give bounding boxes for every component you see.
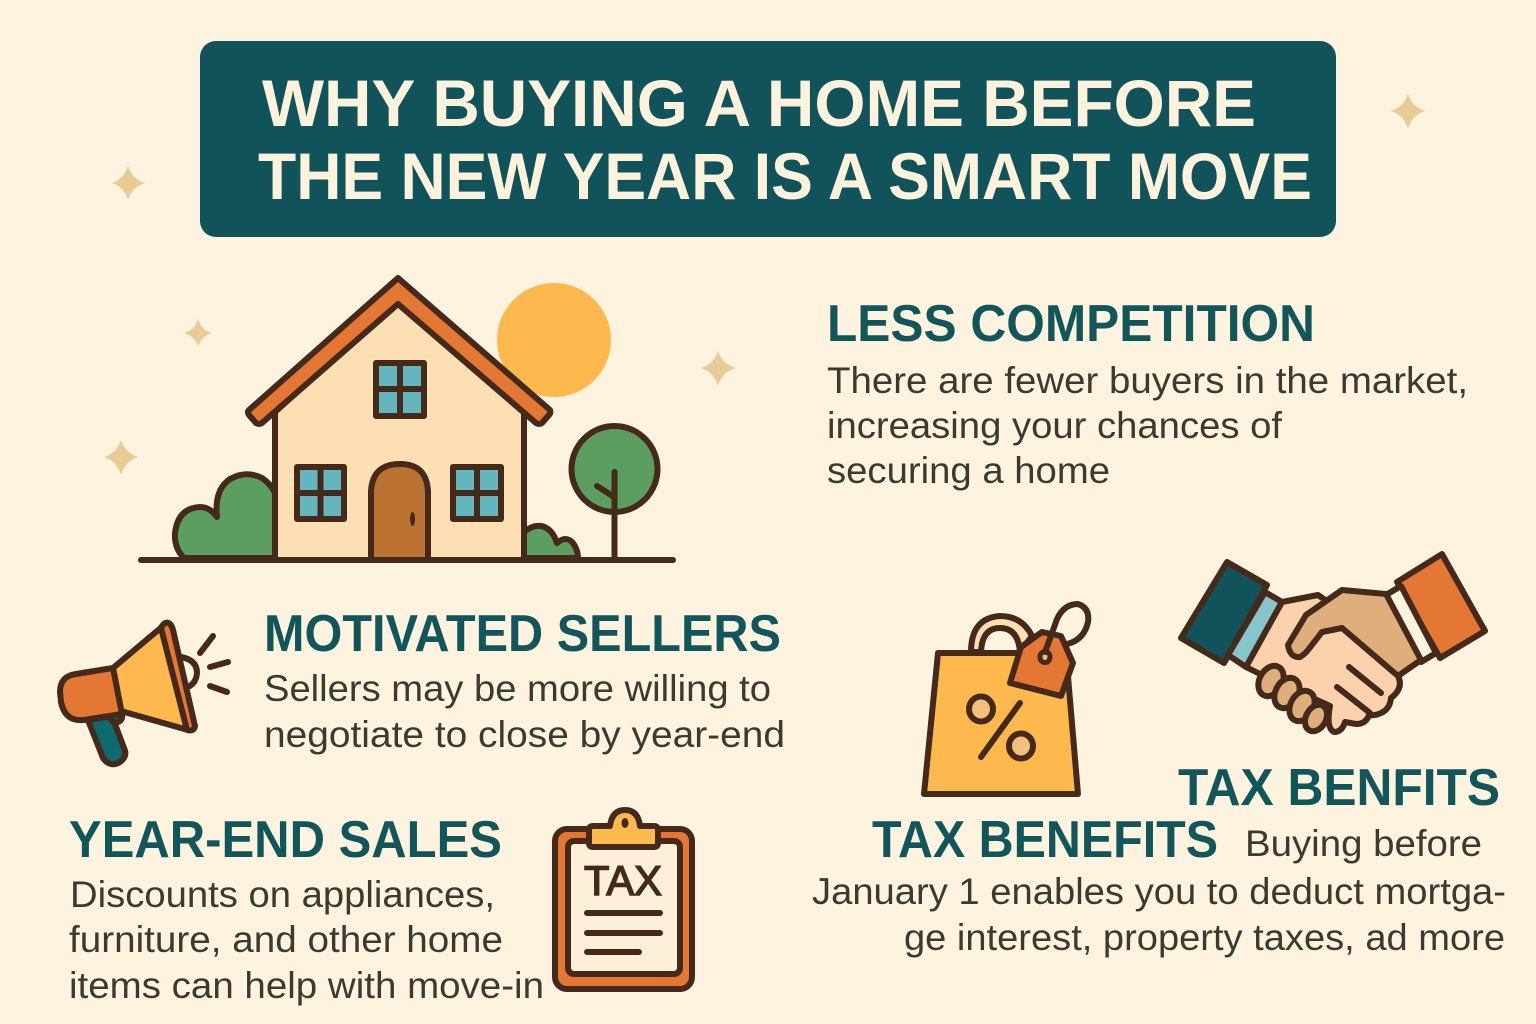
- icon: sparkle lower left of house: [104, 440, 138, 475]
- finger lines: [1337, 667, 1381, 713]
- right bush: [524, 526, 578, 558]
- panel: tax benfits heading: TAX BENFITS: [1178, 759, 1500, 817]
- panel: motivated sellers: Sellers may be more willing to: [264, 668, 771, 709]
- tag string: [1045, 604, 1088, 652]
- bracket: [108, 713, 122, 723]
- panel: year-end sales: Discounts on appliances,: [70, 874, 495, 915]
- panel: tax benefits: ge interest, property taxes, ad more: [904, 917, 1505, 958]
- title banner: THE NEW YEAR IS A SMART MOVE: [258, 139, 1312, 213]
- roof: [248, 278, 550, 424]
- title banner: WHY BUYING A HOME BEFORE: [262, 66, 1256, 140]
- icon: tax clipboard: [555, 810, 692, 989]
- clip hole: [622, 818, 628, 828]
- dark hand: [1288, 590, 1421, 676]
- lower left window: [297, 467, 344, 519]
- panel: less competition: There are fewer buyers in the market,: [827, 360, 1468, 401]
- icon: megaphone: [60, 623, 228, 764]
- clip: [589, 810, 658, 847]
- board: [555, 829, 692, 989]
- icon: sparkle top right: [1391, 94, 1425, 129]
- ground line: [141, 557, 673, 563]
- sound lines: [200, 636, 228, 692]
- panel: less competition: securing a home: [827, 450, 1110, 491]
- panel: less competition: [827, 295, 1468, 491]
- rim: [161, 623, 195, 730]
- body: [60, 668, 122, 720]
- panel: year-end sales: items can help with move-in: [69, 965, 544, 1006]
- icon: handshake: [1181, 554, 1485, 735]
- right cuff: [1397, 554, 1485, 658]
- clipboard label: TAX: [584, 857, 662, 904]
- fingers: [1253, 661, 1331, 735]
- panel: motivated sellers: MOTIVATED SELLERS: [264, 605, 781, 663]
- icon: sparkle near sun: [701, 351, 736, 386]
- price tag: [1010, 632, 1073, 696]
- handle: [88, 716, 125, 764]
- panel: tax benefits: Buying before: [1245, 823, 1482, 864]
- clipboard lines: [587, 913, 660, 952]
- house wall: [275, 300, 524, 560]
- icon: house scene: [141, 278, 673, 560]
- light hand: [1246, 595, 1400, 732]
- left cuff: [1181, 562, 1267, 663]
- left cuff band: [1228, 592, 1282, 667]
- door: [371, 464, 428, 560]
- right cuff band: [1386, 586, 1436, 662]
- panel: year-end sales: YEAR-END SALES: [69, 811, 502, 869]
- panel: tax benefits: [812, 811, 1506, 958]
- tree: [572, 426, 658, 560]
- panel: motivated sellers: negotiate to close by year-end: [264, 714, 785, 755]
- handle outer: [971, 616, 1032, 652]
- left bush: [175, 474, 276, 558]
- sun: [497, 283, 611, 397]
- panel: year-end sales: [69, 811, 544, 1006]
- paper: [568, 841, 680, 974]
- lower right window: [453, 467, 501, 519]
- upper window: [376, 363, 424, 416]
- panel: year-end sales: furniture, and other home: [69, 919, 503, 960]
- door knob: [410, 512, 415, 526]
- icon: shopping bag with tag: [924, 604, 1088, 794]
- icon: sparkle top left: [112, 166, 145, 200]
- panel: tax benefits: TAX BENEFITS: [872, 811, 1218, 869]
- percent sign: [969, 696, 1033, 758]
- back arc: [181, 657, 197, 688]
- icon: sparkle near house left: [184, 319, 212, 347]
- panel: less competition: LESS COMPETITION: [827, 295, 1315, 353]
- panel: less competition: increasing your chances of: [827, 405, 1283, 446]
- tag hole: [1040, 652, 1050, 662]
- bag body: [924, 653, 1078, 794]
- title banner: [200, 41, 1336, 237]
- panel: motivated sellers: [264, 605, 785, 755]
- cone: [113, 626, 188, 730]
- panel: tax benefits: January 1 enables you to deduct mortga-: [812, 871, 1506, 912]
